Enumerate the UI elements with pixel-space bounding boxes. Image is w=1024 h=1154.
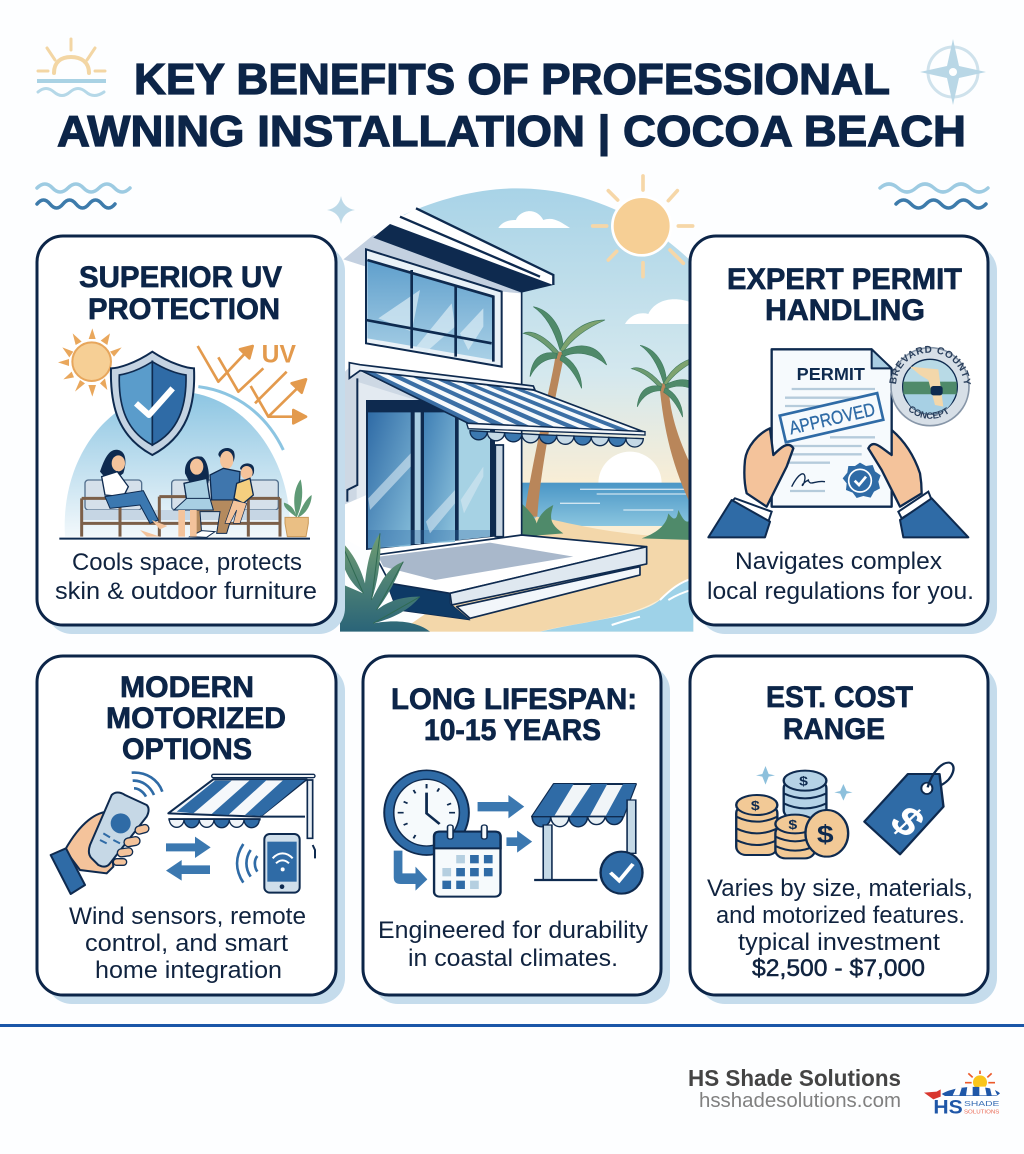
logo: HS Shade Solutions: SOLUTIONS [964, 1109, 1000, 1115]
clock [384, 770, 469, 855]
title: KEY BENEFITS OF PROFESSIONAL [134, 55, 890, 104]
woman [100, 450, 167, 537]
heading: SUPERIOR UV [79, 261, 282, 294]
county seal [889, 346, 971, 426]
caption: Varies by size, materials, [707, 875, 973, 902]
illustration: family protected from UV [58, 328, 312, 539]
caption [707, 875, 973, 982]
decorative waves right [880, 184, 988, 208]
shield [111, 352, 194, 455]
caption [707, 548, 974, 605]
sun [593, 176, 693, 277]
heading: 10-15 YEARS [424, 714, 601, 747]
sun icon [58, 328, 122, 397]
roof [373, 208, 553, 293]
illustration: remote, awning and phone [51, 773, 315, 894]
front coins: $ [788, 818, 797, 833]
heading: LONG LIFESPAN: [391, 683, 637, 716]
heading [79, 261, 282, 326]
blue coin stack [784, 771, 826, 818]
man [190, 448, 240, 537]
icon: sparkle [327, 196, 355, 224]
patio deck [375, 535, 647, 620]
document [772, 349, 892, 507]
caption: Cools space, protects [72, 549, 302, 576]
card frame [37, 236, 345, 634]
card frame [690, 236, 997, 634]
illustration: clock, calendar and awning [384, 770, 642, 897]
tan coin stack: $ [751, 799, 760, 814]
panel: expert permit handling [688, 234, 997, 634]
signature [792, 474, 825, 487]
left hand [708, 428, 793, 537]
ground line [59, 536, 310, 542]
heading [106, 671, 286, 766]
arrows [394, 795, 532, 891]
footer rule [0, 1024, 1024, 1027]
icon: compass rose [920, 39, 986, 105]
beach [400, 517, 693, 632]
shrubs [522, 503, 693, 540]
heading [727, 263, 962, 327]
caption [55, 549, 317, 605]
logo: HS Shade Solutions [924, 1071, 1000, 1118]
check badge [601, 852, 642, 894]
hand with remote [51, 792, 150, 894]
sea [522, 483, 693, 526]
card frame [363, 656, 670, 1004]
wifi waves [237, 844, 257, 883]
footer brand text: HS Shade Solutions [688, 1065, 901, 1091]
blue coin stack: $ [799, 774, 808, 789]
house wall [340, 235, 522, 555]
caption: home integration [95, 957, 282, 984]
panel: long lifespan [363, 656, 670, 1004]
footer brand text [688, 1065, 901, 1112]
small awning [532, 784, 636, 880]
caption: control, and smart [85, 930, 288, 957]
smartphone [264, 834, 300, 893]
setting sun [598, 452, 662, 483]
panel: superior UV protection [37, 236, 345, 634]
scalloped valance [470, 431, 643, 447]
front coins: $ [817, 820, 834, 848]
heading [391, 683, 637, 747]
right hand [868, 430, 968, 537]
caption: typical investment [738, 929, 940, 956]
sync arrows [166, 837, 211, 881]
caption: Navigates complex [735, 548, 942, 575]
central illustration: beach house with awning [340, 176, 705, 632]
badge [843, 463, 881, 498]
county seal: BREVARD COUNTY [889, 346, 971, 384]
heading: MOTORIZED [106, 702, 286, 735]
upper window [366, 249, 502, 367]
footer brand text: hsshadesolutions.com [699, 1090, 901, 1112]
logo: HS Shade Solutions: SHADE [964, 1099, 999, 1108]
heading: EST. COST [766, 681, 913, 714]
decorative waves left [37, 184, 130, 208]
sparkles [756, 766, 853, 801]
heading: EXPERT PERMIT [727, 263, 962, 296]
caption [378, 917, 648, 972]
price tag [864, 763, 954, 854]
palm trees [523, 307, 705, 517]
signal waves [132, 773, 162, 797]
front coins [775, 810, 848, 858]
illustration: coins and price tag [736, 763, 954, 858]
sky [400, 188, 693, 632]
dome [65, 387, 290, 537]
logo: HS Shade Solutions: HS [933, 1097, 963, 1118]
calendar [434, 825, 501, 897]
title: AWNING INSTALLATION | COCOA BEACH [57, 107, 966, 157]
outdoor sofa [82, 480, 282, 537]
foreground plant [340, 533, 430, 632]
heading: MODERN [120, 671, 254, 704]
panel: modern motorized options [37, 656, 345, 1004]
caption [69, 903, 306, 984]
caption: local regulations for you. [707, 578, 974, 605]
sliding glass door [366, 400, 503, 550]
approved stamp: APPROVED [787, 398, 877, 438]
heading: HANDLING [765, 294, 925, 327]
card frame [37, 656, 345, 1004]
caption: Wind sensors, remote [69, 903, 306, 930]
caption: skin & outdoor furniture [55, 578, 317, 605]
potted plant [284, 479, 312, 537]
title [57, 55, 966, 157]
heading [766, 681, 913, 746]
UV arrows [198, 342, 306, 423]
price tag: $ [880, 798, 934, 846]
caption: Engineered for durability [378, 917, 648, 944]
heading: PROTECTION [88, 293, 280, 326]
panel: estimated cost range [690, 656, 997, 1004]
icon: sunrise over water [37, 39, 106, 96]
girl [174, 456, 213, 537]
clouds [498, 211, 693, 324]
family [100, 448, 254, 537]
striped awning [349, 363, 645, 447]
UV arrows: UV [262, 342, 296, 369]
heading: OPTIONS [122, 733, 252, 766]
caption: in coastal climates. [408, 945, 618, 972]
caption: $2,500 - $7,000 [752, 955, 925, 982]
county seal: CONCEPT [909, 406, 948, 419]
water foreground [540, 578, 693, 632]
illustration: permit document held in hands [707, 346, 971, 538]
card frame [690, 656, 997, 1004]
heading: RANGE [783, 713, 885, 746]
child [225, 463, 254, 523]
caption: and motorized features. [716, 902, 965, 929]
document: PERMIT [797, 364, 865, 384]
tan coin stack [736, 795, 777, 855]
mini awning [168, 776, 315, 858]
